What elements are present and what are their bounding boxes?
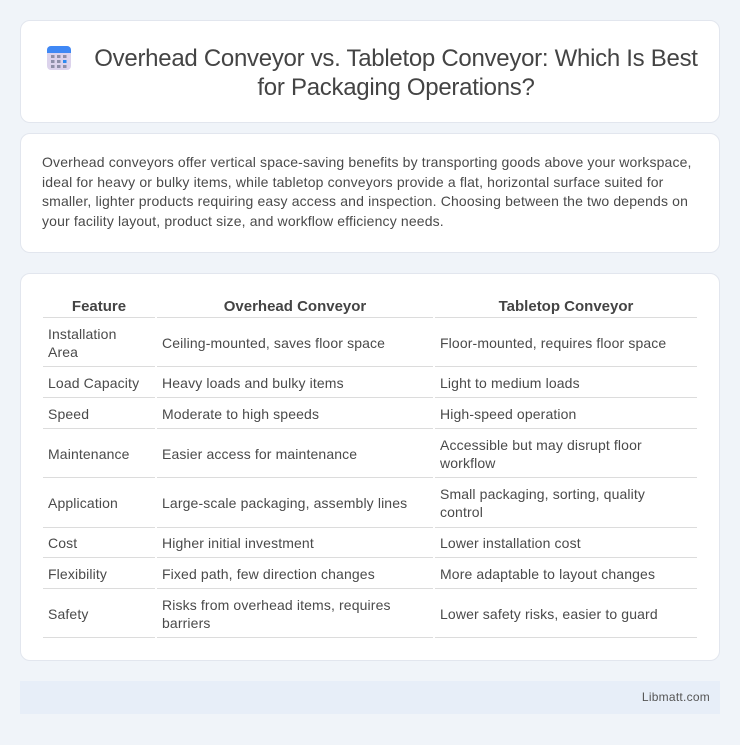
- footer bar: [20, 681, 720, 714]
- table header: Feature: Feature: [72, 298, 126, 315]
- cell: [440, 486, 645, 520]
- cell: Heavy loads and bulky items: [162, 375, 344, 391]
- row: Safety: Safety: [48, 606, 88, 622]
- intro text: [42, 154, 692, 229]
- cell: workflow: [440, 455, 496, 471]
- cell: Moderate to high speeds: [162, 406, 319, 422]
- panel: comparison table: [20, 273, 720, 661]
- intro text: Overhead conveyors offer vertical space-saving benefits by transporting goods above your workspace,: [42, 154, 692, 170]
- table header: Overhead Conveyor: Overhead Conveyor: [224, 298, 366, 315]
- cell: Lower installation cost: [440, 535, 581, 551]
- title: Overhead Conveyor vs. Tabletop Conveyor: Which Is Best: [94, 45, 698, 72]
- cell: Small packaging, sorting, quality: [440, 486, 645, 502]
- intro text: smaller, lighter products requiring easy access and inspection. Choosing between the two depends on: [42, 193, 688, 209]
- cell: Lower safety risks, easier to guard: [440, 606, 658, 622]
- intro text: ideal for heavy or bulky items, while tabletop conveyors provide a flat, horizontal surface suited for: [42, 174, 664, 190]
- cell: Accessible but may disrupt floor: [440, 437, 642, 453]
- cell: Large-scale packaging, assembly lines: [162, 495, 407, 511]
- row: Installation Area: Installation: [48, 326, 116, 342]
- row: Application: Application: [48, 495, 118, 511]
- row: Maintenance: Maintenance: [48, 446, 130, 462]
- row: Flexibility: Flexibility: [48, 566, 107, 582]
- panel: title card: [20, 20, 720, 123]
- row: Load Capacity: Load Capacity: [48, 375, 139, 391]
- cell: [162, 597, 391, 631]
- cell: Light to medium loads: [440, 375, 580, 391]
- title: for Packaging Operations?: [257, 74, 535, 101]
- cell: Floor-mounted, requires floor space: [440, 335, 666, 351]
- cell: barriers: [162, 615, 210, 631]
- table header: Tabletop Conveyor: Tabletop Conveyor: [499, 298, 633, 315]
- cell: Risks from overhead items, requires: [162, 597, 391, 613]
- panel: introduction: [20, 133, 720, 253]
- cell: Easier access for maintenance: [162, 446, 357, 462]
- row: Installation Area: Area: [48, 344, 78, 360]
- row: Speed: Speed: [48, 406, 89, 422]
- cell: [440, 437, 642, 471]
- footer credit: Libmatt.com: [642, 690, 710, 704]
- row: Installation Area: [48, 326, 116, 360]
- cell: High-speed operation: [440, 406, 576, 422]
- title: [94, 45, 698, 101]
- cell: Higher initial investment: [162, 535, 314, 551]
- cell: More adaptable to layout changes: [440, 566, 655, 582]
- cell: Ceiling-mounted, saves floor space: [162, 335, 385, 351]
- row: Cost: Cost: [48, 535, 77, 551]
- cell: control: [440, 504, 483, 520]
- cell: Fixed path, few direction changes: [162, 566, 375, 582]
- icon: calendar grid: [47, 46, 71, 70]
- intro text: your facility layout, product size, and workflow efficiency needs.: [42, 212, 444, 228]
